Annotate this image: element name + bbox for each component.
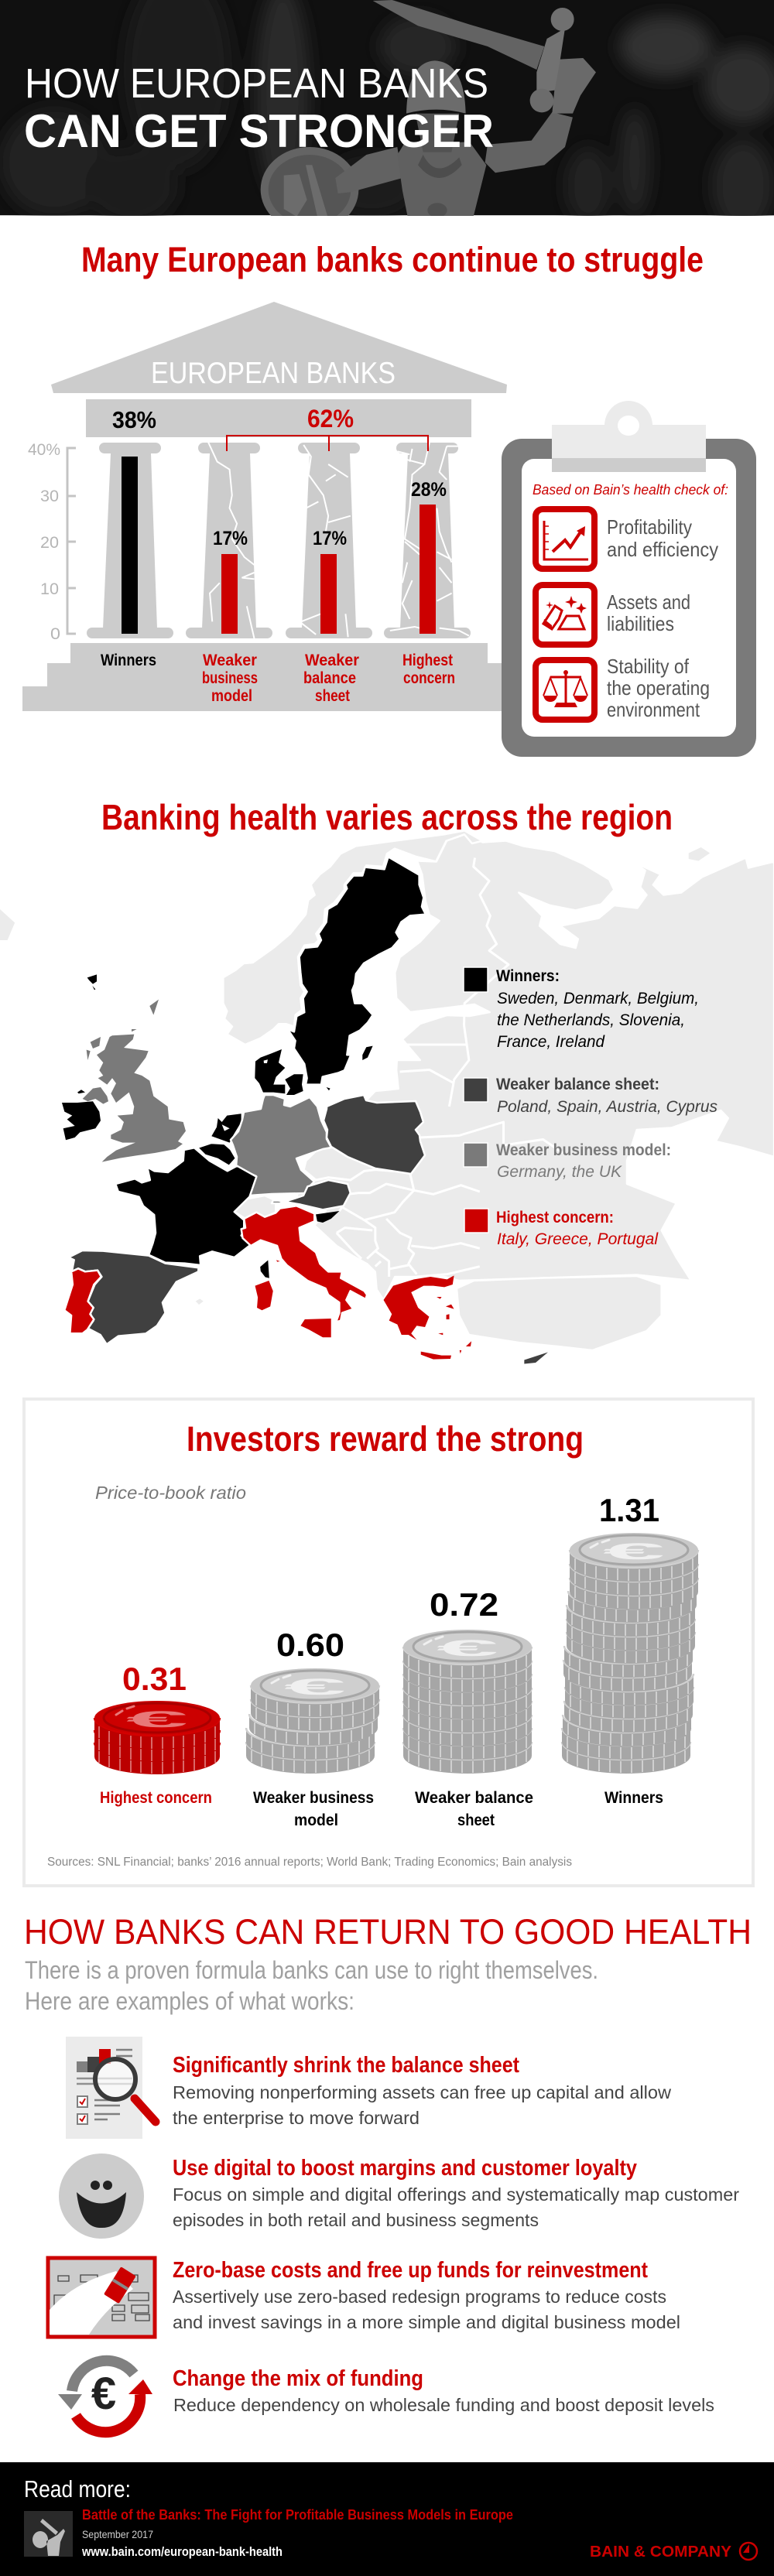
non-EU background land	[0, 830, 774, 1350]
legend: highest concern: Italy, Greece, Portugal	[497, 1230, 659, 1248]
coin stack: highest concern: €	[126, 1706, 188, 1733]
coin stack: weaker balance sheet: €	[437, 1635, 498, 1661]
map legend	[464, 967, 717, 1248]
item body: Focus on simple and digital offerings and systematically map customer	[173, 2184, 739, 2205]
knight figurine	[261, 0, 596, 232]
value labels: 38%	[112, 406, 156, 433]
icon: scales	[536, 660, 594, 720]
date: September 2017	[82, 2528, 153, 2540]
coin labels	[100, 1789, 663, 1829]
Slovenia	[316, 1211, 339, 1223]
legend: weaker business model: Weaker business model:	[496, 1141, 671, 1159]
Austria	[272, 1180, 351, 1209]
item body: episodes in both retail and business segments	[173, 2210, 539, 2230]
sources: Sources: SNL Financial; banks’ 2016 annual reports; World Bank; Trading Economics; Bain analysis	[47, 1856, 572, 1869]
item body	[173, 2287, 680, 2332]
item body: Assertively use zero-based redesign programs to reduce costs	[173, 2287, 666, 2307]
panel: clipboard health check	[502, 401, 756, 757]
y axis: 10	[40, 580, 59, 598]
icon: gold bars	[536, 585, 594, 645]
text: assets	[607, 590, 690, 635]
title	[24, 60, 494, 157]
coin stack: weaker business model: €	[284, 1674, 346, 1700]
item body: the enterprise to move forward	[173, 2108, 420, 2128]
Denmark, Ireland, Netherlands and islands	[62, 974, 373, 1143]
Italy with islands	[241, 1206, 367, 1322]
pillar cracks	[208, 443, 469, 638]
heading: many banks struggle: Many European banks continue to struggle	[81, 240, 704, 279]
icon: eraser on flowchart	[48, 2258, 155, 2337]
panel: temple chart	[22, 302, 511, 711]
value labels: 17%	[313, 528, 347, 549]
bracket 62%	[227, 436, 428, 451]
blurred background photo	[0, 0, 774, 232]
text: profitability: and efficiency	[607, 538, 718, 561]
y axis: 20	[40, 534, 59, 552]
item heading: Zero-base costs and free up funds for reinvestment	[173, 2258, 648, 2283]
legend: winners: the Netherlands, Slovenia,	[497, 1011, 685, 1029]
legend: highest concern: Highest concern:	[496, 1209, 614, 1226]
clipboard heading: Based on Bain’s health check of:	[533, 482, 728, 498]
text: profitability: Profitability	[607, 515, 692, 539]
south west and south countries	[64, 1148, 471, 1360]
item body: Removing nonperforming assets can free up capital and allow	[173, 2082, 672, 2102]
intro text: There is a proven formula banks can use to right themselves.	[25, 1956, 598, 1984]
read more: Read more:	[24, 2475, 131, 2502]
steps	[22, 643, 511, 711]
category labels: sheet	[315, 687, 350, 705]
coin stack: weaker business model	[246, 1668, 379, 1774]
coin values	[122, 1492, 659, 1697]
coin stack: winners: €	[603, 1538, 665, 1565]
report title: Battle of the Banks: The Fight for Profitable Business Models in Europe	[82, 2507, 513, 2523]
legend: winners	[464, 967, 699, 1051]
text: stability: Stability of	[607, 655, 690, 678]
icon: smiley	[59, 2154, 144, 2239]
coin labels: Winners	[604, 1789, 663, 1807]
category labels: business	[202, 669, 258, 687]
intro text	[25, 1956, 598, 2015]
text: stability: environment	[607, 698, 700, 721]
coin labels: Highest concern	[100, 1789, 212, 1807]
legend: weaker business model: Germany, the UK	[497, 1163, 622, 1181]
item body: and invest savings in a more simple and digital business model	[173, 2312, 680, 2332]
bars	[122, 457, 436, 634]
legend: weaker balance sheet	[464, 1076, 717, 1116]
legend: weaker business model	[464, 1141, 671, 1181]
heading: return to good health: HOW BANKS CAN RETURN TO GOOD HEALTH	[24, 1912, 752, 1952]
coin labels: Weaker balance	[415, 1789, 533, 1807]
y axis	[28, 441, 76, 643]
heading: investors: Investors reward the strong	[187, 1419, 584, 1459]
category labels: Winners	[101, 652, 156, 669]
Germany	[231, 1095, 331, 1196]
category labels: balance	[303, 669, 356, 687]
pillars	[87, 443, 471, 638]
category labels: Highest	[402, 652, 453, 669]
legend: winners: Winners:	[496, 967, 560, 985]
y axis: 30	[40, 487, 59, 505]
category labels: Weaker	[203, 652, 257, 669]
legend: winners: France, Ireland	[497, 1033, 605, 1051]
United Kingdom	[83, 1000, 186, 1162]
intro text: Here are examples of what works:	[25, 1987, 354, 2015]
item body	[173, 2082, 672, 2128]
value labels: 28%	[411, 479, 447, 501]
coin values: 1.31	[599, 1492, 659, 1528]
item body: Reduce dependency on wholesale funding and boost deposit levels	[173, 2395, 714, 2415]
y axis: 40%	[28, 441, 60, 459]
text: stability	[607, 655, 710, 721]
icon: profit chart	[536, 509, 594, 569]
y axis: 0	[50, 625, 60, 643]
coin labels: sheet	[457, 1811, 495, 1829]
value labels	[112, 405, 447, 549]
Portugal	[64, 1268, 101, 1333]
legend: winners: Sweden, Denmark, Belgium,	[497, 990, 699, 1007]
item heading: Use digital to boost margins and customer loyalty	[173, 2156, 637, 2181]
pediment label: EUROPEAN BANKS	[151, 357, 396, 390]
heading: banking health: Banking health varies across the region	[101, 797, 673, 837]
coin labels: Weaker business	[253, 1789, 374, 1807]
coin values: 0.31	[122, 1661, 187, 1697]
Cyprus	[524, 1353, 548, 1363]
bain logo: BAIN & COMPANY	[590, 2544, 732, 2561]
coin labels: model	[294, 1811, 338, 1829]
entablature	[86, 399, 471, 437]
coin stack: weaker balance sheet	[403, 1630, 532, 1774]
Belgium	[197, 1143, 236, 1166]
Poland	[324, 1095, 425, 1174]
clipboard clip	[552, 401, 706, 472]
value labels: 17%	[213, 528, 248, 549]
coin values: 0.72	[430, 1586, 498, 1623]
text: profitability	[607, 515, 718, 561]
pediment	[51, 302, 507, 393]
panel: investors reward	[24, 1399, 753, 1886]
Greece with islands	[384, 1275, 471, 1360]
text: assets: liabilities	[607, 612, 674, 635]
France and Corsica	[115, 1148, 270, 1279]
coin stack: winners	[562, 1533, 698, 1774]
category labels	[101, 652, 455, 705]
footer	[0, 2462, 774, 2576]
item: shrink the balance sheet	[66, 2037, 672, 2139]
chart subtitle: Price-to-book ratio	[95, 1483, 246, 1503]
title: CAN GET STRONGER	[24, 105, 494, 157]
item heading: Significantly shrink the balance sheet	[173, 2053, 519, 2078]
legend: highest concern	[464, 1209, 659, 1248]
Spain	[69, 1250, 198, 1344]
icon: euro with arrows	[58, 2361, 152, 2432]
category labels: concern	[403, 669, 455, 687]
item heading: Change the mix of funding	[173, 2366, 423, 2391]
item: change funding	[58, 2361, 714, 2432]
legend: weaker balance sheet: Poland, Spain, Austria, Cyprus	[497, 1098, 717, 1116]
url: www.bain.com/european-bank-health	[81, 2544, 283, 2559]
legend: weaker balance sheet: Weaker balance sheet:	[496, 1076, 659, 1093]
coin values: 0.60	[276, 1627, 344, 1663]
icon: magnifier on report	[66, 2037, 156, 2139]
value labels: 62%	[307, 405, 354, 433]
coin stack: highest concern	[94, 1701, 220, 1774]
item: use digital	[59, 2154, 739, 2239]
category labels: Weaker	[305, 652, 359, 669]
map of europe	[0, 830, 774, 1363]
text: assets: Assets and	[607, 590, 690, 614]
item body	[173, 2184, 739, 2230]
category labels: model	[211, 687, 252, 705]
Sweden	[288, 857, 426, 1085]
icon: euro with arrows: €	[91, 2369, 116, 2419]
header banner	[0, 0, 774, 232]
item: zero-base costs	[48, 2258, 680, 2337]
title: HOW EUROPEAN BANKS	[25, 60, 488, 107]
text: stability: the operating	[607, 676, 710, 700]
thumbnail	[24, 2511, 73, 2557]
